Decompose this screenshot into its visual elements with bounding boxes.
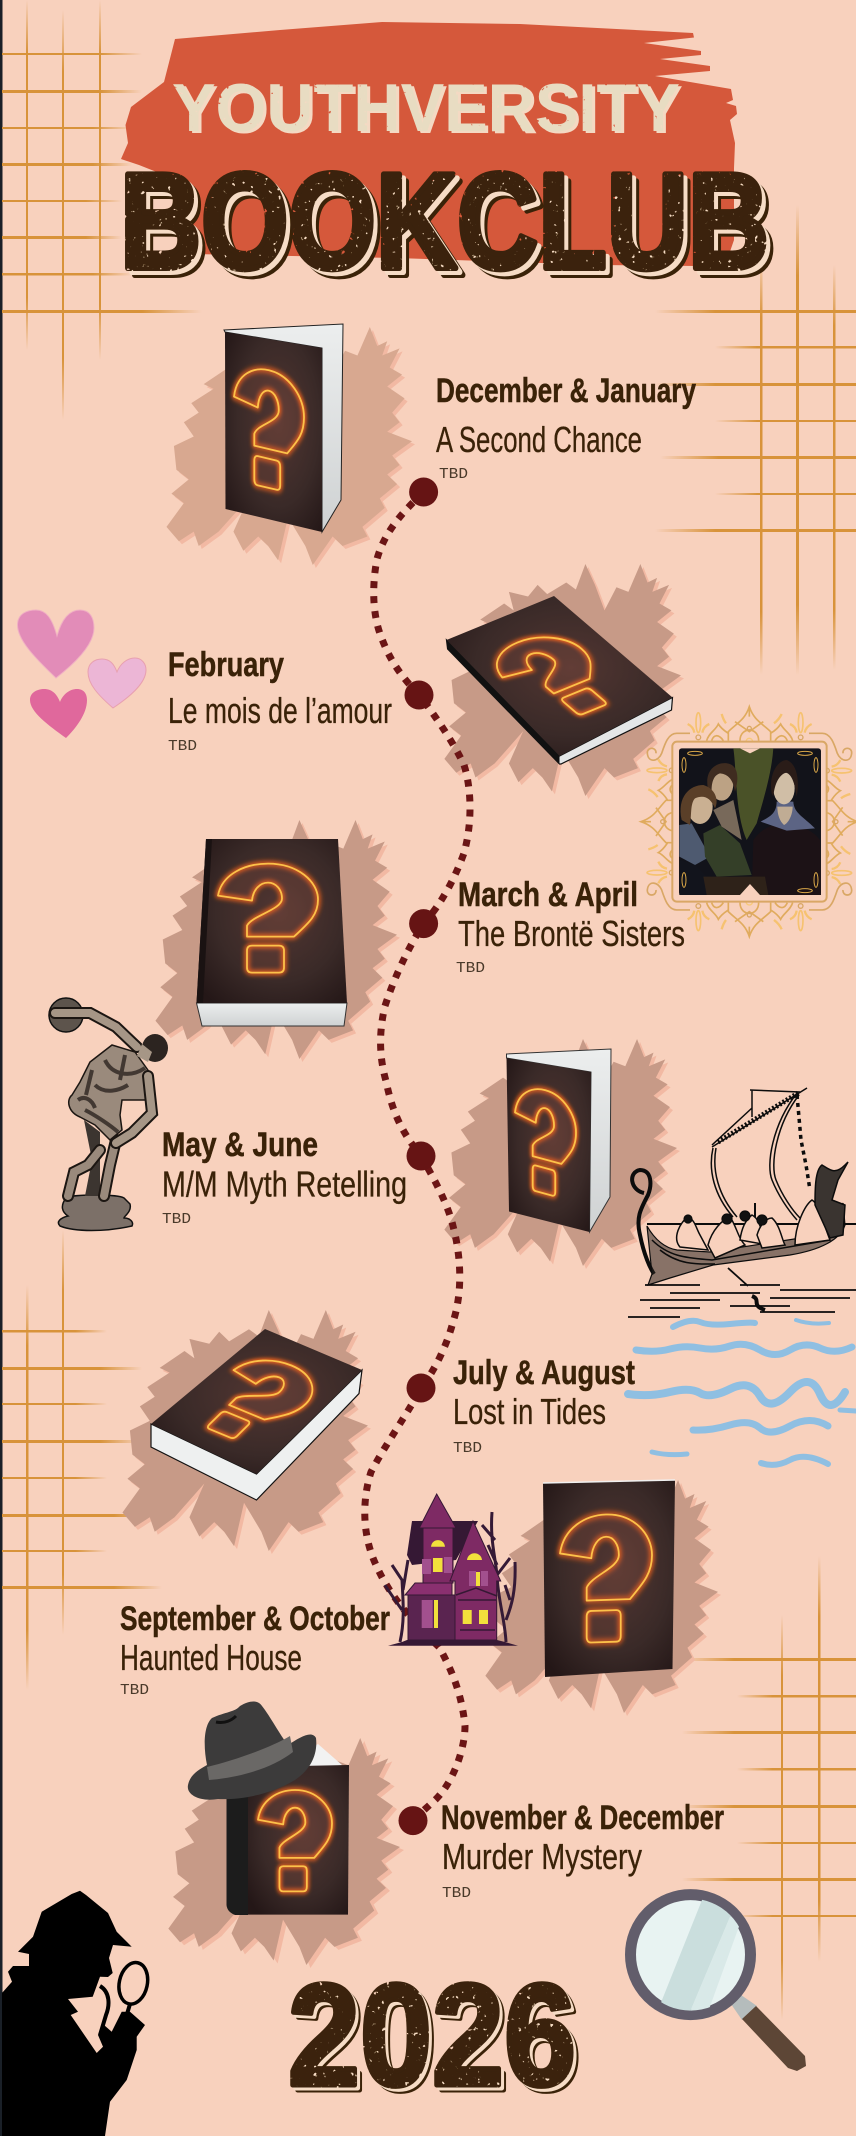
disc [49, 998, 83, 1032]
year: 2026: 2026 [288, 1954, 576, 2116]
porch [408, 1595, 455, 1640]
text: March & April [456, 876, 685, 977]
text: February: February [168, 646, 284, 684]
steps and ground [388, 1640, 518, 1646]
three sisters [679, 748, 821, 895]
text: March & April: March & April [458, 876, 638, 914]
icon: discobolus statue [49, 998, 168, 1230]
crew hair [684, 1211, 767, 1225]
text: May & June [162, 1126, 407, 1228]
text: November & December: November & December [441, 1799, 724, 1837]
text: September & October: Haunted House [120, 1637, 302, 1678]
book 4: May & June [506, 1049, 611, 1232]
grid decoration bottom left [2, 1230, 162, 1690]
lit windows [431, 1540, 488, 1628]
text: February: Le mois de l’amour [168, 690, 392, 731]
timeline markers [398, 478, 438, 1835]
book 2: February [446, 596, 672, 764]
text: November & December [441, 1799, 724, 1902]
text: September & October: TBD [120, 1682, 149, 1699]
crew [677, 1162, 848, 1258]
grid decoration top left [2, 0, 202, 420]
text: July & August: TBD [453, 1440, 482, 1457]
text: September & October [120, 1600, 390, 1699]
text: March & April: The Brontë Sisters [458, 913, 685, 954]
year: 2026: 2026 [293, 1959, 581, 2121]
text: February [168, 646, 392, 755]
torso [69, 1045, 153, 1140]
painting [679, 748, 821, 895]
ornate portrait frame: Bronte sisters [641, 707, 856, 937]
sea [628, 1268, 856, 1317]
text: December & January [436, 372, 696, 483]
icon: blue waves [628, 1320, 856, 1465]
book 3: March & April [196, 839, 347, 1026]
icon: viking ship [628, 1088, 856, 1317]
dotted timeline path [365, 492, 470, 1820]
book 5: July & August [151, 1329, 362, 1500]
icon: haunted house [385, 1494, 518, 1646]
frame border [672, 742, 827, 902]
header brush stroke [121, 22, 737, 266]
year: 2026: 2026 [291, 1957, 579, 2119]
base [58, 1195, 133, 1230]
text: September & October: September & October [120, 1600, 390, 1638]
title: Youthversity: YOUTHVERSITY [172, 70, 680, 146]
text: February: TBD [168, 738, 197, 755]
text: May & June: TBD [162, 1211, 191, 1228]
text: July & August: July & August [453, 1354, 635, 1392]
text: May & June: May & June [162, 1126, 318, 1164]
text: July & August: Lost in Tides [453, 1391, 606, 1432]
ornament [641, 707, 856, 937]
grid decoration top right [655, 205, 856, 675]
grid decoration bottom right [682, 1556, 856, 2020]
text: December & January: TBD [439, 466, 468, 483]
title: Youthversity: YOUTHVERSITY [175, 72, 683, 148]
text: November & December: TBD [442, 1885, 471, 1902]
icon: fedora hat [188, 1702, 316, 1800]
tower [423, 1528, 453, 1583]
wing [450, 1521, 501, 1640]
icon: hearts [18, 610, 146, 738]
horizon [647, 1203, 856, 1224]
brush stains behind books [122, 327, 721, 1968]
bare trees [385, 1512, 515, 1642]
left roof [407, 1521, 478, 1565]
book 6: September & October [543, 1480, 675, 1677]
text: December & January: A Second Chance [436, 419, 642, 460]
spire [419, 1494, 456, 1528]
stump [84, 1120, 100, 1196]
icon: magnifying glass [630, 1895, 806, 2071]
sail and rigging [711, 1088, 807, 1220]
text: July & August [453, 1354, 635, 1457]
book 7: November & December [226, 1744, 349, 1915]
book 1: December & January [224, 324, 343, 532]
text: November & December: Murder Mystery [442, 1836, 642, 1877]
icon: detective silhouette [2, 1891, 151, 2136]
right arm [116, 1076, 152, 1143]
text: March & April: TBD [456, 960, 485, 977]
head [142, 1034, 168, 1062]
legs [68, 1140, 116, 1196]
text: May & June: M/M Myth Retelling [162, 1164, 407, 1204]
arm with disc [55, 1013, 137, 1047]
text: December & January: December & January [436, 372, 696, 410]
shutters and door [422, 1557, 488, 1628]
hull [632, 1170, 654, 1274]
